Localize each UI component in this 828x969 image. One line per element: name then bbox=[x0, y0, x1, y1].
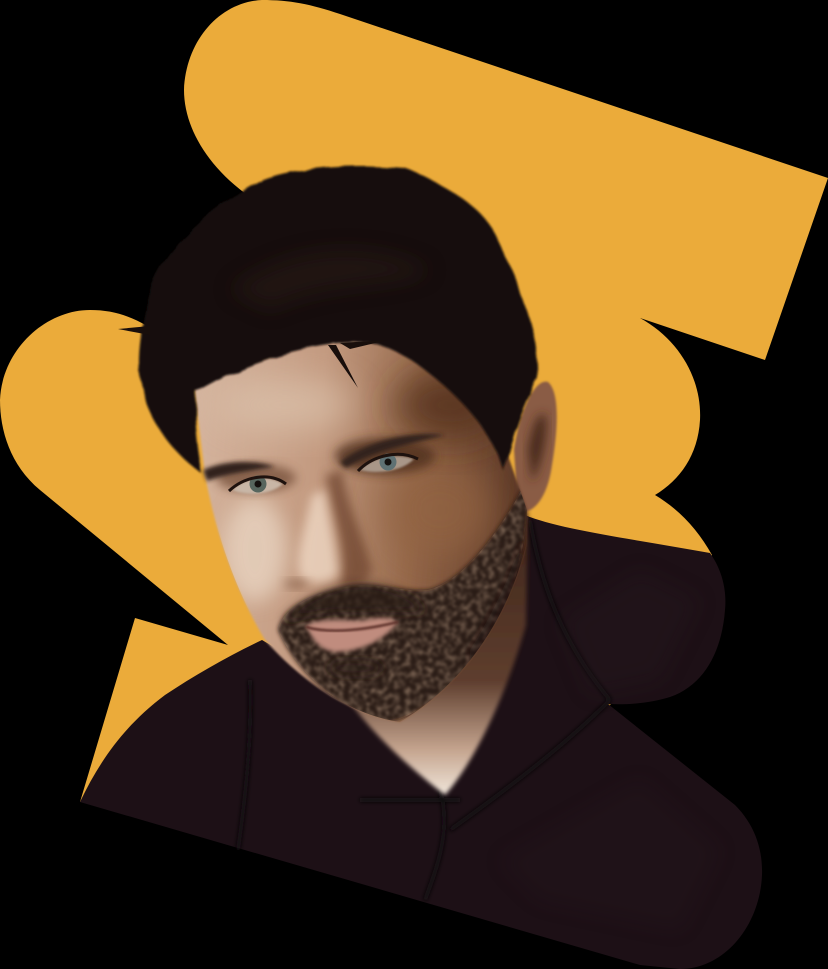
moustache bbox=[282, 584, 425, 622]
hair bbox=[118, 166, 538, 474]
lips bbox=[306, 618, 398, 652]
right eye bbox=[358, 454, 418, 472]
eye socket shadows bbox=[216, 464, 296, 492]
beard texture bbox=[278, 480, 527, 722]
ear bbox=[514, 382, 557, 512]
left eyebrow bbox=[203, 462, 275, 481]
nose highlight bbox=[298, 490, 338, 583]
hair sheen bbox=[230, 250, 430, 310]
dark side of forehead bbox=[395, 370, 505, 440]
neck bbox=[345, 510, 528, 795]
loose strands bbox=[118, 326, 388, 388]
left eye bbox=[229, 476, 286, 494]
nose shadow bbox=[326, 470, 372, 588]
chin patch shadow bbox=[327, 660, 383, 676]
right cheek tone bbox=[385, 460, 495, 560]
beard bbox=[278, 480, 527, 722]
forehead highlight bbox=[215, 379, 355, 431]
shirt bbox=[80, 515, 762, 969]
cheek highlight bbox=[223, 498, 287, 602]
right eyebrow bbox=[340, 434, 445, 468]
shirt folds bbox=[238, 520, 610, 900]
face bbox=[194, 330, 528, 722]
nostril shadow bbox=[284, 579, 308, 589]
jaw shadow bbox=[466, 544, 525, 664]
